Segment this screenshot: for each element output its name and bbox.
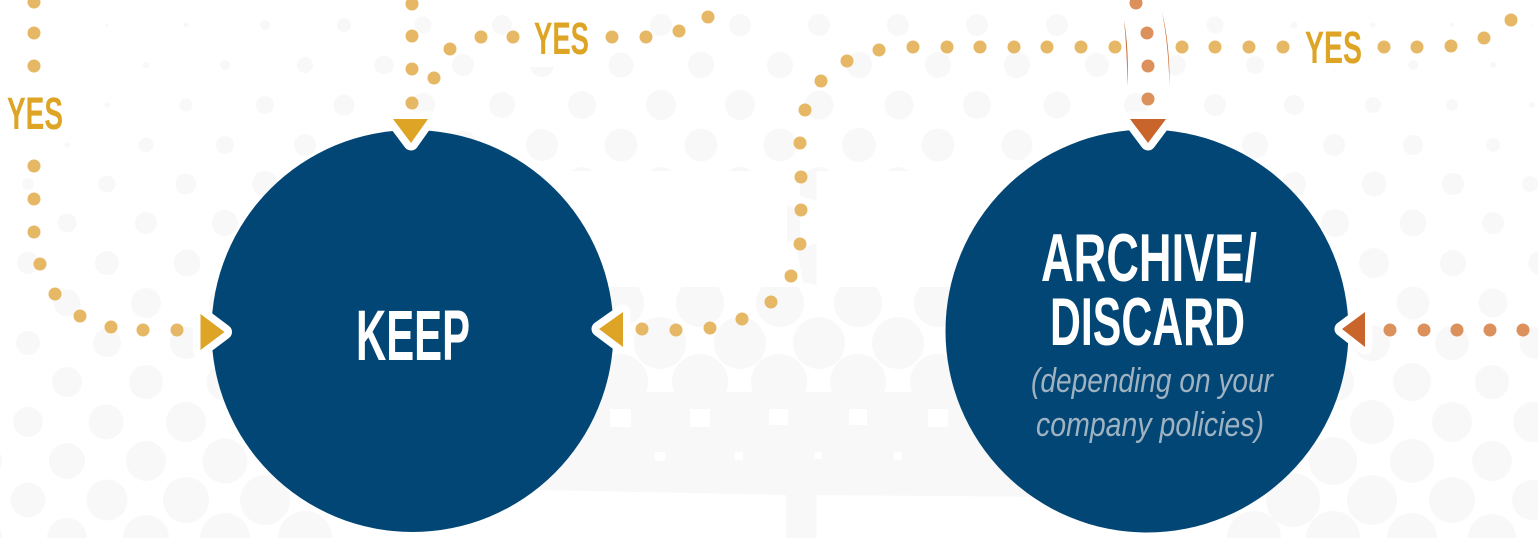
heading: ARCHIVE/DISCARD: DISCARD bbox=[1050, 284, 1245, 360]
arrows: orange dotted path into ARCHIVE from top bbox=[1130, 0, 1154, 106]
arrows: orange dotted path into ARCHIVE from right bbox=[1384, 324, 1530, 336]
arrows: gold dotted path into KEEP from top bbox=[406, 0, 714, 110]
text block: company policies note: (depending on your bbox=[1031, 362, 1274, 400]
heading: KEEP: KEEP bbox=[356, 297, 470, 376]
white halos behind YES labels and line crossing bbox=[0, 0, 1369, 138]
panel: KEEP circle bbox=[212, 130, 614, 532]
arrowheads: KEEP bbox=[200, 119, 623, 350]
text block: company policies note: company policies) bbox=[1036, 406, 1264, 444]
arrows: orange line crossing bridge bbox=[1124, 12, 1170, 86]
arrows: gold dotted path into KEEP from left bbox=[28, 0, 184, 336]
arrowheads: ARCHIVE/DISCARD bbox=[1130, 119, 1365, 347]
panel: ARCHIVE/DISCARD circle bbox=[946, 130, 1348, 532]
arrows: gold dotted path into KEEP from right bbox=[636, 14, 1518, 336]
heading: ARCHIVE/DISCARD: ARCHIVE/ bbox=[1041, 220, 1257, 296]
label: YES left: YES bbox=[7, 88, 63, 139]
label: YES top right: YES bbox=[1305, 22, 1362, 73]
label: YES top middle: YES bbox=[534, 13, 589, 64]
